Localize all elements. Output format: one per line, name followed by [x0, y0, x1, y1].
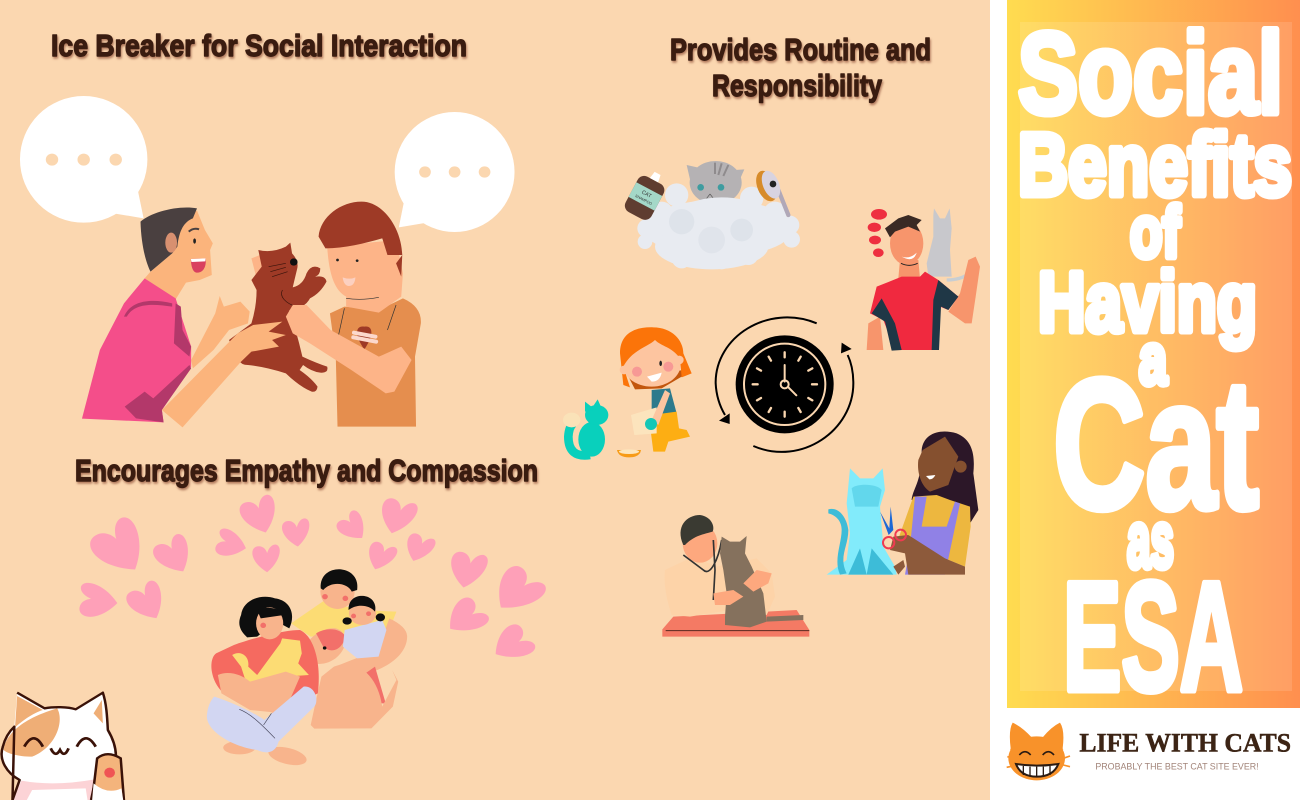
man's front arm	[162, 322, 286, 427]
cat mascot waving	[2, 693, 124, 800]
shampoo bottle: SHAMPOO	[634, 194, 653, 206]
family	[207, 569, 407, 768]
title	[1018, 10, 1292, 723]
girl with orange hair	[620, 327, 692, 452]
speech bubble right	[395, 112, 515, 232]
shampoo foam	[637, 183, 800, 269]
logo cat	[1007, 723, 1070, 780]
speech bubble left	[20, 96, 147, 223]
logo	[1007, 723, 1291, 780]
heading: provides routine: Provides Routine and	[670, 32, 931, 67]
sidebar background	[990, 0, 1300, 800]
shampoo bottle	[622, 167, 671, 222]
illustration: routine care around a clock	[563, 161, 980, 457]
illustration: two people talking with a cat	[20, 96, 515, 427]
title: as	[1127, 495, 1174, 584]
title: of	[1130, 193, 1181, 273]
background panel	[0, 0, 990, 800]
hearts	[76, 493, 549, 667]
logo tagline: PROBABLY THE BEST CAT SITE EVER!	[1095, 762, 1259, 772]
heading: ice breaker: Ice Breaker for Social Interaction	[51, 28, 467, 63]
brown cat	[229, 243, 327, 392]
heading: encourages empathy: Encourages Empathy and Compassion	[75, 453, 538, 488]
teal cat and bowl	[563, 399, 641, 457]
logo wordmark: LIFE WITH CATS	[1079, 728, 1291, 758]
man in pink shirt	[82, 207, 250, 422]
shampoo bottle: CAT	[640, 190, 653, 200]
groomer with blue cat	[827, 431, 978, 575]
kitten in foam	[687, 161, 745, 210]
man in red shirt with grey cat	[867, 208, 980, 351]
title: a	[1139, 320, 1168, 400]
illustration: vet and groomer	[662, 431, 978, 637]
vet with grey cat	[662, 515, 809, 637]
brush	[752, 168, 788, 215]
heading: provides routine: Responsibility	[712, 68, 883, 103]
gradient title panel	[1007, 0, 1300, 708]
illustration: hearts and family with pets	[2, 493, 549, 800]
heading: provides routine	[670, 32, 931, 103]
circular arrows	[716, 317, 853, 452]
boy in orange shirt	[286, 202, 421, 427]
clock	[736, 335, 834, 433]
